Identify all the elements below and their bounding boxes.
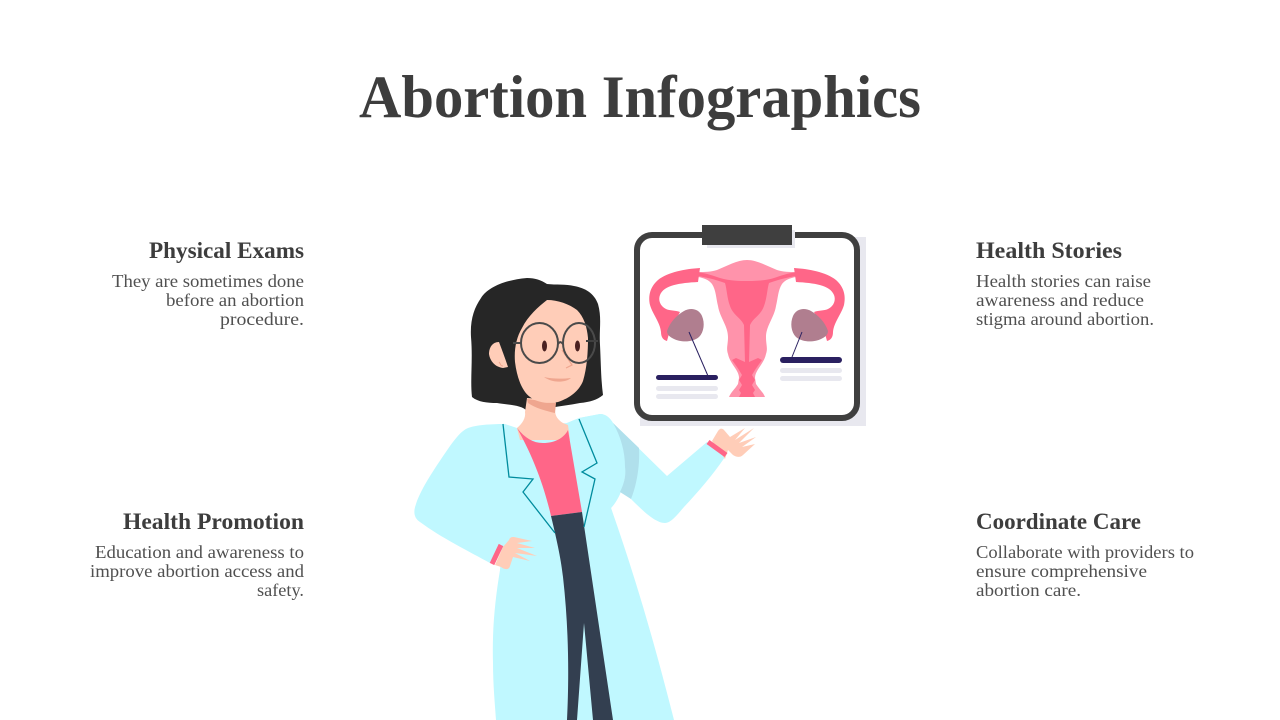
- text block: physical exams: procedure.: [220, 309, 304, 329]
- doctor illustration: [414, 278, 756, 720]
- trousers: [551, 512, 613, 720]
- nose: [562, 350, 572, 368]
- text block: physical exams: before an abortion: [166, 290, 304, 310]
- ovary right: [791, 309, 828, 341]
- hair: [471, 278, 603, 411]
- ear: [489, 342, 508, 368]
- right hand: [712, 428, 756, 459]
- text block: coordinate care: abortion care.: [976, 580, 1081, 600]
- text block: health promotion: Education and awareness to: [95, 542, 304, 562]
- coat torso fill: [500, 414, 640, 600]
- text block: health promotion: safety.: [257, 580, 304, 600]
- glasses: [513, 323, 598, 363]
- lapel lines: [503, 419, 597, 533]
- text block: physical exams: They are sometimes done: [112, 271, 304, 291]
- callout right: [780, 332, 842, 381]
- text block: coordinate care: Collaborate with providers to: [976, 542, 1194, 562]
- eyes: [542, 340, 580, 352]
- lab coat: [414, 414, 725, 720]
- face: [515, 300, 588, 403]
- neck: [517, 398, 570, 440]
- left hand: [495, 537, 537, 569]
- left cuff: [492, 545, 501, 564]
- text block: coordinate care: ensure comprehensive: [976, 561, 1147, 581]
- text block: health promotion: improve abortion access and: [90, 561, 304, 581]
- uterus diagram: [649, 260, 845, 397]
- text block: health stories: stigma around abortion.: [976, 309, 1154, 329]
- text block: health stories: [976, 238, 1154, 329]
- callout left: [656, 332, 718, 399]
- text block: coordinate care: [976, 509, 1194, 600]
- title: Abortion Infographics: [359, 64, 921, 130]
- text block: health stories: Health Stories: [976, 238, 1122, 263]
- right cuff: [708, 442, 726, 455]
- text block: health stories: Health stories can raise: [976, 271, 1151, 291]
- clipboard with anatomy diagram: [637, 225, 866, 426]
- shirt: [517, 428, 582, 516]
- text block: physical exams: Physical Exams: [149, 238, 304, 263]
- ovary left: [667, 309, 704, 341]
- text block: health promotion: [90, 509, 304, 600]
- text block: health promotion: Health Promotion: [123, 509, 304, 534]
- mouth: [544, 377, 571, 382]
- text block: coordinate care: Coordinate Care: [976, 509, 1141, 534]
- neck shadow: [527, 399, 556, 413]
- arm shadow: [613, 423, 639, 499]
- text block: health stories: awareness and reduce: [976, 290, 1144, 310]
- text block: physical exams: [112, 238, 304, 329]
